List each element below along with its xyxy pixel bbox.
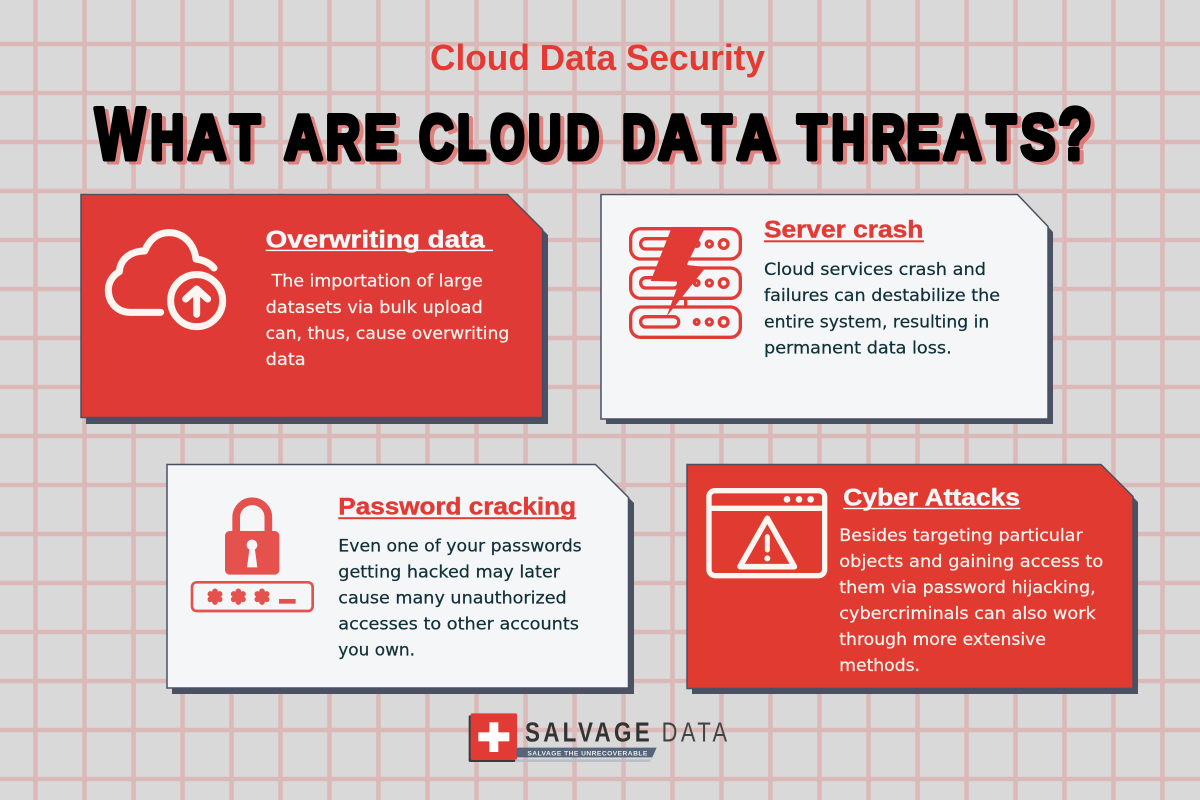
logo: SalvageData: DATA	[662, 718, 731, 748]
panel: overwriting data	[81, 194, 548, 424]
icon: cloud upload	[108, 233, 223, 327]
text: cyber attacks description: methods.	[839, 656, 920, 675]
title: What are cloud data threats?: H	[150, 103, 184, 173]
heading: cyber attacks: Cyber Attacks	[843, 485, 1020, 512]
text: overwriting data description: datasets via bulk upload	[266, 298, 483, 317]
text: password cracking description: getting hacked may later	[338, 563, 560, 582]
text: overwriting data description	[266, 272, 509, 369]
title: What are cloud data threats?: A	[737, 103, 775, 173]
icon: browser window with warning triangle	[709, 491, 825, 576]
text: overwriting data description: The importation of large	[271, 272, 483, 291]
icon: server with lightning bolt	[631, 228, 740, 337]
text: cyber attacks description: Besides targeting particular	[839, 526, 1083, 545]
title: What are cloud data threats?: T	[797, 103, 827, 173]
text: server crash description: entire system, resulting in	[764, 312, 989, 331]
title: What are cloud data threats?: T	[987, 103, 1016, 173]
title: What are cloud data threats?: U	[528, 103, 561, 173]
logo: SalvageData: SALVAGE	[525, 718, 653, 748]
icon: padlock and password field	[192, 501, 313, 611]
title: What are cloud data threats?: H	[831, 103, 865, 173]
title: What are cloud data threats?: O	[490, 103, 525, 173]
text: password cracking description: Even one of your passwords	[338, 537, 582, 556]
title: What are cloud data threats?: E	[906, 103, 940, 173]
text: cyber attacks description: objects and gaining access to	[839, 552, 1103, 571]
title: What are cloud data threats?: ?	[1058, 94, 1092, 175]
text: server crash description: failures can destabilize the	[764, 286, 1000, 305]
text: password cracking description	[338, 537, 582, 659]
text: cyber attacks description: cybercriminals can also work	[839, 604, 1096, 623]
subtitle: Cloud Data Security: Cloud Data Security	[430, 37, 765, 78]
panel: password cracking	[167, 464, 634, 694]
title: What are cloud data threats?: A	[188, 103, 226, 173]
panel: cyber attacks	[687, 464, 1138, 694]
panel: server crash	[601, 194, 1053, 424]
heading: password cracking: Password cracking	[338, 493, 576, 520]
text: cyber attacks description	[839, 526, 1103, 675]
title: What are cloud data threats?: A	[943, 103, 982, 173]
title: What are cloud data threats?: R	[326, 103, 360, 173]
text: password cracking description: accesses to other accounts	[338, 614, 579, 633]
text: server crash description: Cloud services crash and	[764, 260, 986, 279]
title: What are cloud data threats?: R	[871, 103, 905, 173]
title: What are cloud data threats?: C	[419, 103, 454, 173]
text: password cracking description: cause many unauthorized	[338, 588, 567, 607]
title: What are cloud data threats?: T	[230, 103, 260, 173]
title: What are cloud data threats?: A	[284, 103, 323, 173]
logo: SalvageData: SALVAGE THE UNRECOVERABLE	[527, 751, 648, 758]
title: What are cloud data threats?: S	[1021, 103, 1055, 173]
title: What are cloud data threats?: E	[364, 103, 397, 173]
text: server crash description: permanent data loss.	[764, 338, 952, 357]
heading: overwriting data: Overwriting data	[266, 227, 485, 254]
heading: server crash: Server crash	[764, 217, 923, 244]
text: server crash description	[764, 260, 1000, 357]
text: cyber attacks description: them via password hijacking,	[839, 578, 1096, 597]
title: What are cloud data threats?: A	[658, 103, 697, 173]
title: What are cloud data threats?: T	[702, 103, 732, 173]
title: What are cloud data threats?: D	[566, 103, 599, 173]
title: What are cloud data threats?: L	[457, 103, 486, 173]
title: What are cloud data threats?: D	[622, 103, 655, 173]
title: What are cloud data threats?: W	[95, 94, 145, 175]
text: overwriting data description: data	[266, 350, 306, 369]
text: overwriting data description: can, thus, cause overwriting	[266, 324, 509, 343]
logo: SalvageData	[469, 713, 731, 762]
text: cyber attacks description: through more extensive	[839, 630, 1046, 649]
text: password cracking description: you own.	[338, 640, 415, 659]
